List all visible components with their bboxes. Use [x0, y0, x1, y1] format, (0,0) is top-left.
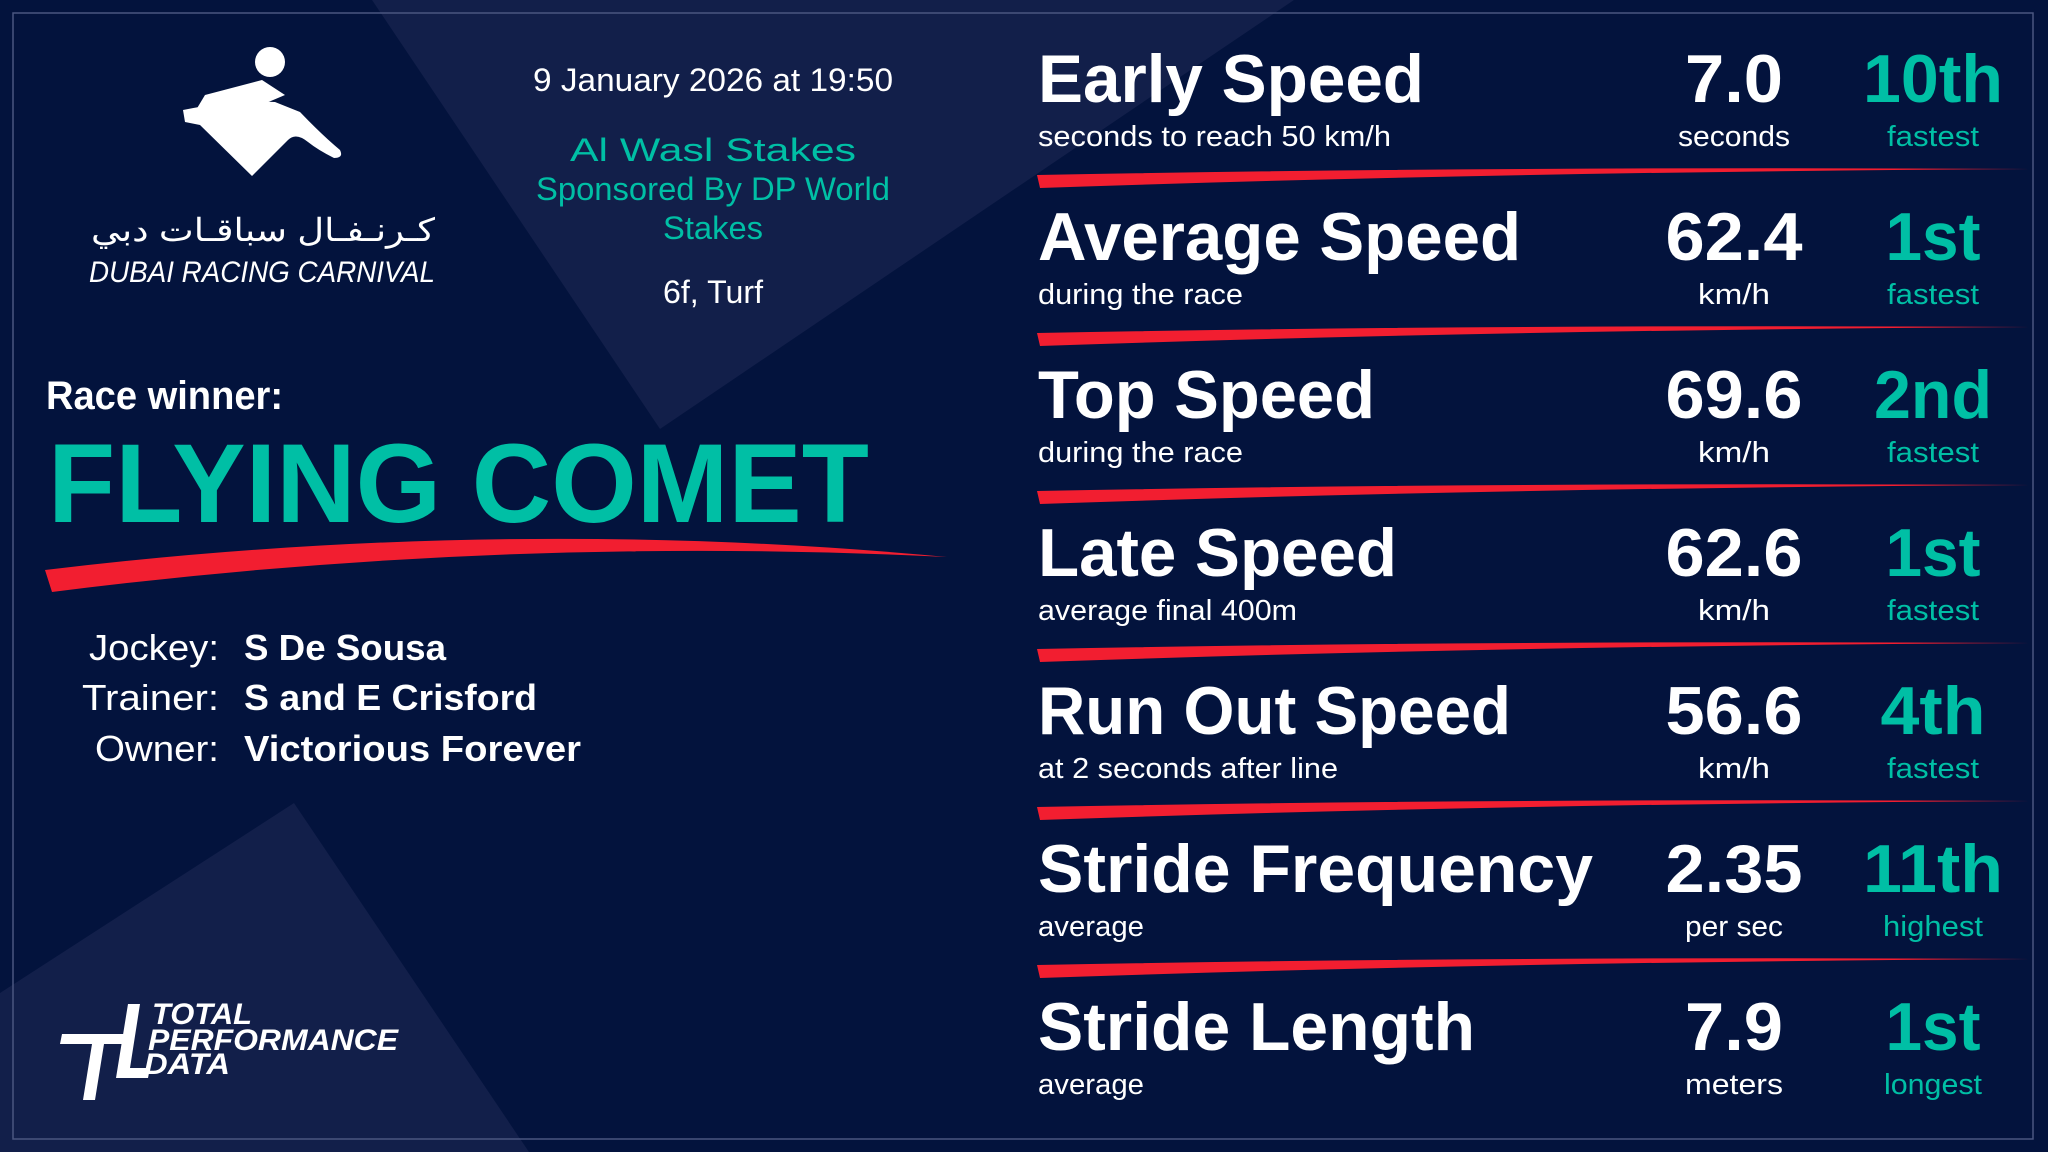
text block: connections	[82, 627, 581, 769]
logo text: Dubai Racing Carnival: DUBAI RACING CARNIVAL	[89, 256, 435, 289]
arabic logo text: كـرنـفـال سباقـات دبي	[91, 212, 436, 249]
row: Run Out Speed	[1037, 673, 2030, 820]
row: Run Out Speed: fastest	[1887, 753, 1979, 785]
race info block: Stakes	[663, 210, 763, 246]
row: Average Speed: fastest	[1887, 279, 1979, 311]
row: Stride Frequency: per sec	[1685, 911, 1783, 943]
row: Late Speed: 1st	[1886, 515, 1980, 591]
row: Early Speed: fastest	[1887, 121, 1979, 153]
row: Average Speed: 62.4	[1666, 199, 1803, 275]
row: Top Speed: km/h	[1698, 437, 1770, 469]
row: Average Speed: during the race	[1038, 279, 1243, 311]
row: Stride Frequency: 11th	[1863, 831, 2003, 907]
heading: race winner: Race winner:	[46, 374, 283, 418]
row: Stride Length: Stride Length	[1038, 989, 1475, 1065]
row: Average Speed: 1st	[1886, 199, 1980, 275]
panel: stats rows	[1037, 41, 2030, 1101]
text block: connections: Victorious Forever	[244, 728, 581, 769]
row: Stride Length: average	[1038, 1069, 1144, 1101]
text block: connections: Trainer:	[82, 677, 219, 718]
row: Top Speed: Top Speed	[1038, 357, 1375, 433]
row: Stride Frequency: Stride Frequency	[1038, 831, 1593, 907]
row: Late Speed: km/h	[1698, 595, 1770, 627]
text block: connections: Jockey:	[89, 627, 219, 668]
icon: Total Performance Data logo	[60, 998, 399, 1100]
row: Late Speed: average final 400m	[1038, 595, 1297, 627]
row: Late Speed: Late Speed	[1038, 515, 1397, 591]
heading: race winner	[45, 374, 947, 592]
race info block: Sponsored By DP World	[536, 171, 890, 207]
row: Stride Length: 7.9	[1685, 989, 1783, 1065]
row: Stride Length: longest	[1884, 1069, 1982, 1101]
icon: Total Performance Data logo: PERFORMANCE	[148, 1024, 399, 1057]
row: Top Speed: fastest	[1887, 437, 1979, 469]
row: Top Speed	[1037, 357, 2030, 504]
row: Average Speed: km/h	[1698, 279, 1770, 311]
row: Stride Frequency: 2.35	[1666, 831, 1802, 907]
row: Run Out Speed: 56.6	[1666, 673, 1802, 749]
heading: race winner: FLYING COMET	[48, 421, 869, 546]
row: Stride Length: meters	[1685, 1069, 1783, 1101]
row: Average Speed: Average Speed	[1038, 199, 1521, 275]
row: Run Out Speed: Run Out Speed	[1038, 673, 1511, 749]
row: Stride Frequency: average	[1038, 911, 1144, 943]
text block: connections: S De Sousa	[244, 627, 447, 668]
row: Run Out Speed: km/h	[1698, 753, 1770, 785]
row: Early Speed	[1037, 41, 2030, 188]
race info block	[533, 62, 893, 310]
row: Average Speed	[1037, 199, 2030, 346]
race info block: 9 January 2026 at 19:50	[533, 62, 893, 98]
row: Stride Frequency	[1037, 831, 2030, 978]
row: Top Speed: 69.6	[1666, 357, 1802, 433]
row: Run Out Speed: 4th	[1880, 673, 1986, 749]
row: Early Speed: 7.0	[1685, 41, 1783, 117]
icon: Dubai Racing Carnival horse logo	[183, 47, 341, 176]
icon: Total Performance Data logo: TOTAL	[152, 998, 252, 1031]
row: Late Speed: 62.6	[1666, 515, 1802, 591]
row: Late Speed: fastest	[1887, 595, 1979, 627]
row: Early Speed: seconds to reach 50 km/h	[1038, 121, 1391, 153]
row: Stride Length	[1038, 989, 1982, 1101]
row: Stride Length: 1st	[1886, 989, 1980, 1065]
row: Top Speed: 2nd	[1874, 357, 1992, 433]
race info block: Al Wasl Stakes	[570, 132, 856, 168]
row: Stride Frequency: highest	[1883, 911, 1983, 943]
text block: connections: Owner:	[95, 728, 219, 769]
row: Top Speed: during the race	[1038, 437, 1243, 469]
row: Early Speed: Early Speed	[1038, 41, 1424, 117]
row: Run Out Speed: at 2 seconds after line	[1038, 753, 1338, 785]
row: Late Speed	[1037, 515, 2030, 662]
race info block: 6f, Turf	[663, 274, 763, 310]
text block: connections: S and E Crisford	[244, 677, 537, 718]
icon: Total Performance Data logo: DATA	[144, 1048, 230, 1081]
row: Early Speed: seconds	[1678, 121, 1790, 153]
row: Early Speed: 10th	[1863, 41, 2003, 117]
